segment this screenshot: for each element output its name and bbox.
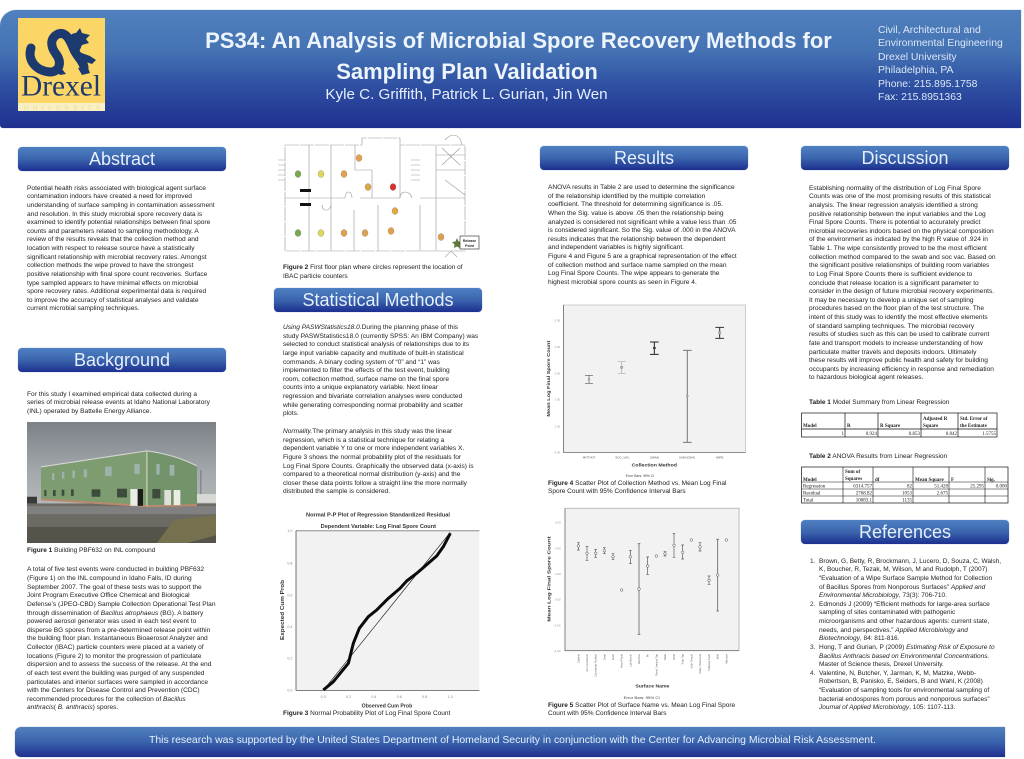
table 2: ANOVA results: Sig. [987, 478, 996, 483]
table 1: model summary: Square [923, 424, 939, 429]
IBAC particle counter markers [295, 154, 444, 240]
results text: highest microbial spore counts as seen in Figure 4. [548, 279, 697, 286]
surface name categories: Hood Panel [620, 654, 624, 668]
background methods text: particulates and interior surfaces were sampled in accordance [27, 679, 208, 686]
y axis ticks: 3.00 [554, 371, 561, 375]
table 1 caption: Table 1 Model Summary from Linear Regression [809, 399, 949, 406]
results text: ANOVA results in Table 2 are used to determine the significance [548, 184, 735, 191]
error bars note: Error Bars: 95% CI [626, 474, 654, 478]
table 2: ANOVA results: 10083.1 [856, 498, 872, 504]
reference entries: Hong, T and Gurian, P (2009) Estimating Risk of Exposure to [819, 644, 995, 651]
background intro text [27, 391, 210, 415]
reference entries: needs, and perspectives.” Applied Microbiology and [819, 627, 968, 634]
release point label [460, 236, 479, 249]
x axis categories: MITT/KIT [583, 455, 595, 459]
plot area [296, 531, 479, 690]
axis tick labels: 0.8 [287, 562, 292, 566]
reference numbers: 2. [810, 601, 815, 608]
abstract text: review of the results reveals that the collection method and [27, 236, 199, 243]
mean points [577, 539, 728, 591]
table 2: ANOVA results: Total [803, 498, 814, 504]
surface name categories: Cabinet [576, 654, 580, 663]
table 2: ANOVA results: Sum of [845, 470, 860, 475]
figure 4 caption: Spore Count with 95% Confidence Interval Bars [548, 488, 686, 495]
plot area [563, 305, 746, 452]
axis tick labels: 1.0 [448, 695, 453, 699]
x axis title: Collection Method [632, 463, 677, 468]
abstract text [27, 185, 215, 312]
surface name categories: Lab Bench [628, 653, 632, 667]
surface name categories: Panel, Vertical Top [654, 653, 658, 676]
y axis ticks: -2.00 [554, 623, 561, 627]
abstract text: current microbial sampling techniques. [27, 305, 140, 312]
abstract text: contamination indoors have created a need for improved [27, 193, 192, 200]
axis tick labels: 0.8 [422, 695, 427, 699]
discussion text: the significant positive relationships of building room variables [809, 262, 989, 269]
reference entries: sampling of sites contaminated with pathogenic [819, 609, 955, 616]
y axis ticks: 1.00 [554, 424, 561, 428]
background methods text: locations (Figure 2) to monitor the progression of particulate [27, 653, 201, 660]
reference entries [819, 558, 1001, 711]
poster title: PS34: An Analysis of Microbial Spore Recovery Methods for [205, 28, 832, 53]
x axis categories [583, 455, 724, 459]
table 1: model summary: 1.5755 [982, 432, 996, 437]
abstract text: to improve the accuracy of statistical analyses and validate [27, 297, 199, 304]
discussion text: particulate matter travels and deposits indoors. Ultimately [809, 349, 976, 356]
release point label: Release [463, 239, 476, 243]
figure 5 caption [548, 702, 735, 717]
figure 5 caption: Figure 5 Scatter Plot of Surface Name vs. Mean Log Final Spore [548, 702, 735, 709]
background methods text: Joint Program Executive Office Chemical and Biological [27, 592, 190, 599]
surface name categories: Stair Treads [689, 653, 693, 668]
figure 3 caption: Figure 3 Normal Probability Plot of Log Final Spore Count [283, 710, 450, 717]
figure 2 caption: IBAC particle counters [283, 273, 348, 280]
table 1: model summary: the Estimate [960, 424, 988, 429]
discussion text: consider in the design of future microbial recovery experiments. [809, 288, 994, 295]
release point label: Point [465, 244, 475, 248]
reference numbers: 1. [810, 558, 815, 565]
table 1: model summary: Std. Error of [960, 417, 988, 422]
reference entries: Master of Science thesis, Drexel University. [819, 661, 944, 668]
abstract text: counts and parameters related to sampling methodology. A [27, 228, 199, 235]
axis tick labels: 0.0 [287, 689, 292, 693]
table 2: ANOVA results: Squares [845, 477, 862, 482]
table 2: ANOVA results: F [951, 478, 954, 483]
statistical methods text: plots. [283, 410, 299, 417]
statistical methods text: room, collection method, surface name on the final spore [283, 376, 449, 383]
section heading: References [801, 520, 1009, 544]
background intro text: (INL) operated by Battelle Energy Alliance. [27, 408, 151, 415]
table 2: ANOVA results: Mean Square [915, 478, 944, 483]
discussion text: to Log Final Spore Counts there is sufficient evidence to [809, 271, 972, 278]
surface name categories: Tabletop Rack [707, 653, 711, 671]
table 2: ANOVA results: 1053 [902, 492, 912, 496]
background methods text: (Figure 1) on the INL compound in Idaho Falls, ID during [27, 575, 192, 582]
background methods text: recommended procedures for the collection of Bacillus [27, 696, 186, 703]
error bars [577, 533, 719, 634]
table 2: ANOVA results: 51.428 [934, 484, 948, 490]
table 1: model summary: R [847, 424, 851, 429]
abstract text: spore recovery rates. Additional experimental data is required [27, 288, 206, 295]
table 1: model summary: 0.853 [909, 432, 920, 437]
reference entries: K, Boucher, R, Tezak, M, Wilson, M and Rudolph, T (2007) [819, 566, 987, 573]
background methods text: of each test event the building was purged of any suspended [27, 670, 204, 677]
contact details: Philadelphia, PA [878, 65, 953, 76]
statistical methods text: study PASWStatistics18.0 (currently SPSS: An IBM Company) was [283, 333, 478, 340]
surface name categories: Floor [611, 654, 615, 660]
contact details: Drexel University [878, 52, 957, 63]
discussion text: fate and transport models to increase understanding of how [809, 340, 983, 347]
results text: results indicates that the relationship between the dependent [548, 236, 725, 243]
x axis categories: WIPE [716, 455, 724, 459]
table 1: model summary: Adjusted R [923, 417, 948, 422]
authors: Kyle C. Griffith, Patrick L. Gurian, Jin Wen [325, 86, 608, 103]
discussion text [809, 185, 996, 381]
table 1: model summary [801, 412, 998, 438]
table 2: ANOVA results: 0.000 [996, 484, 1008, 490]
abstract text: collection methods the wipe proved to have the strongest [27, 262, 193, 269]
discussion text: analysis. The linear regression analysis identified a strong [809, 202, 978, 209]
section heading: Abstract: Abstract [89, 149, 155, 169]
section heading: References: References [859, 522, 951, 542]
background methods text [27, 566, 216, 711]
section heading: Background [18, 348, 226, 372]
surface name categories: Machine [637, 653, 641, 664]
figure 5 caption: Count with 95% Confidence Interval Bars [548, 710, 667, 717]
error bars [585, 327, 724, 442]
results text: coefficient. The threshold for determining significance is .05. [548, 201, 723, 208]
contact details: Civil, Architectural and [878, 24, 981, 36]
y axis ticks: 6.00 [555, 520, 561, 524]
section heading: Abstract [18, 147, 226, 171]
mean points [588, 331, 721, 397]
statistical methods text: counts into a unique explanatory variable. Next linear [283, 384, 438, 391]
section heading: Background: Background [74, 350, 170, 370]
background methods text: anthracis( B. anthracis) spores. [27, 704, 118, 711]
abstract text: type sampled appears to have minimal effects on microbial [27, 280, 198, 287]
axis tick labels: 0.4 [371, 695, 376, 699]
background intro text: For this study I examined empirical data collected during a [27, 391, 197, 398]
discussion text: Counts was one of the most promising results of this statistical [809, 193, 991, 200]
background methods text: Collector (IBAC) particle counters were placed at a variety of [27, 644, 204, 651]
surface name categories: Window [724, 654, 728, 663]
results text [548, 184, 737, 286]
reference numbers: 3. [810, 644, 815, 651]
surface name categories [576, 653, 728, 677]
surface name categories: Desk [602, 653, 606, 660]
discussion text: conclude that release location is a significant parameter to [809, 280, 979, 287]
reference entries: Biotechnology, 84: 811-816. [819, 635, 899, 642]
error bars note: Error Bars: 95% CI [624, 696, 660, 700]
statistical methods text: large input variable capacity and multitude of built-in statistical [283, 350, 464, 357]
figure 1: photo of building PBF632 [27, 422, 216, 543]
plot area [565, 508, 739, 651]
background methods text: with the Centers for Disease Control and Prevention (CDC) [27, 687, 200, 694]
table 2: ANOVA results: Model [803, 478, 817, 483]
figure 2 caption: Figure 2 First floor plan where circles represent the location of [283, 264, 463, 271]
surface name categories: Pit [646, 654, 650, 657]
axis tick labels: 0.2 [287, 657, 292, 661]
reference entries: Brown, G, Betty, R, Brockmann, J, Lucero, D, Souza, C, Walsh, [819, 558, 1001, 565]
figure 3: normal P-P plot [280, 512, 480, 709]
table 2: ANOVA results: Residual [803, 492, 821, 496]
statistical methods text: Using PASWStatistics18.0.During the planning phase of this [283, 324, 458, 331]
section heading: Results: Results [614, 148, 674, 168]
figure 4: collection method error bars [546, 304, 746, 478]
table 1: model summary: 0.924 [866, 432, 878, 437]
background methods text: the building floor plan. Instantaneous Bioaerosol Analyzer and [27, 635, 208, 642]
y axis title: Mean Log Final Spore Count [546, 340, 551, 417]
statistical methods text: selected to conduct statistical analysis of relationships due to its [283, 341, 469, 348]
y axis ticks: 4.00 [555, 546, 561, 550]
figure 2: first floor plan [278, 135, 480, 258]
table 2: ANOVA results: df [875, 478, 880, 483]
results text: Log Final Spore Counts. The wipe appears to generate the [548, 270, 719, 277]
table 2: ANOVA results: 25.295 [970, 484, 984, 490]
y axis ticks: 0.00 [555, 598, 561, 602]
reference entries: Environmental Microbiology, 73(3): 706-710. [819, 592, 947, 599]
section heading: Statistical Methods: Statistical Methods [302, 290, 454, 310]
background methods text: disperse BG spores from a pre-determined release point within [27, 627, 210, 634]
reference entries: Bacillus Anthracis based on Environmental Concentrations. [819, 653, 989, 660]
results text: Figure 4 and Figure 5 are a graphical representation of the effect [548, 253, 737, 260]
section heading: Statistical Methods [274, 288, 482, 312]
discussion text: microbial recoveries indoors based on the physical composition [809, 228, 994, 235]
statistical methods text [283, 324, 478, 417]
y axis ticks [554, 520, 561, 653]
table 2: ANOVA results: 82 [907, 484, 912, 490]
discussion text: It may be necessary to develop a unique set of sampling [809, 297, 974, 304]
normality text: dependent variable Y to one or more independent variables X. [283, 445, 464, 452]
section heading: Results [540, 146, 748, 170]
x axis label: Observed Cum Prob [362, 703, 412, 709]
results text: of the relationship identified by the multiple correlation [548, 193, 705, 200]
y axis ticks: 5.00 [554, 319, 561, 323]
x axis title: Surface Name [635, 684, 670, 689]
discussion text: procedures based on the floor plan of the test structure. The [809, 305, 984, 312]
statistical methods text: commands. A binary coding system of “0” and “1” was [283, 358, 440, 366]
footer banner [15, 727, 1005, 757]
header banner [0, 10, 1021, 128]
background methods text: powered aerosol generator was used in each test event to [27, 618, 196, 625]
y axis ticks: 4.00 [554, 345, 561, 349]
x axis categories: SWAB [650, 455, 659, 459]
figure 5: surface name error bars [546, 508, 740, 700]
reference diagonal [323, 532, 450, 690]
poster title: Sampling Plan Validation [336, 59, 598, 84]
results text: and independent variables is highly significant. [548, 244, 684, 251]
reference entries: Journal of Applied Microbiology, 105: 1107-113. [819, 704, 955, 711]
discussion text: these results will improve public health and safety for building [809, 357, 988, 364]
normality text: distributed the sample is considered. [283, 488, 390, 495]
y axis ticks [554, 319, 561, 454]
results text: of collection method and surface name sampled on the mean [548, 262, 727, 269]
abstract text: Potential health risks associated with biological agent surface [27, 185, 206, 192]
discussion text: to hazardous biological agent releases. [809, 374, 923, 381]
background methods text: through dissemination of Bacillus atrophaeus (BG). A battery [27, 610, 203, 617]
table 2: ANOVA results: Regression [803, 484, 826, 490]
reference numbers [810, 558, 815, 677]
normality text: Log Final Spore Counts. Graphically the observed data (x-axis) is [283, 462, 474, 470]
results text: analyzed is considered not significant while a value less than .05 [548, 218, 736, 226]
discussion text: Final Spore Counts. There is potential to accurately predict [809, 219, 980, 226]
logo: Drexel University dragon [18, 18, 105, 111]
surface name categories: Air Conditioner [585, 654, 589, 672]
x axis categories: SOC_VAC [615, 455, 630, 459]
y axis ticks: 2.00 [554, 398, 561, 402]
table 2 caption: Table 2 ANOVA Results from Linear Regression [809, 453, 947, 460]
abstract text: location with respect to release source have a statistically [27, 245, 194, 252]
discussion text: occupants by increasing efficiency in response and remediation [809, 366, 994, 373]
abstract text: examined to identify potential relationships between final spore [27, 219, 210, 226]
axis tick labels: 0.4 [287, 625, 292, 629]
figure 2 caption [283, 264, 463, 280]
reference numbers: 4. [810, 670, 815, 677]
reference entries: Robertson, B, Panisko, E, Seiders, B and Wahl, K (2008) [819, 678, 983, 685]
table 1: model summary: 1 [842, 432, 844, 437]
table 1: model summary: R Square [880, 424, 901, 429]
statistical methods text: regression and bivariate correlation analyses were conducted [283, 393, 462, 400]
discussion text: of standard sampling techniques. The microbial recovery [809, 323, 974, 330]
contact details [878, 24, 1003, 103]
figure 4 caption [548, 480, 726, 495]
figure 4 caption: Figure 4 Scatter Plot of Collection Method vs. Mean Log Final [548, 480, 726, 487]
surface name categories: Table, Horizontal [698, 654, 702, 674]
reference entries: “Evaluation of a Wipe Surface Sample Method for Collection [819, 575, 992, 582]
reference entries: of Bacillus Spores from Nonporous Surfaces” Applied and [819, 584, 985, 591]
table 2: ANOVA results: 2768.82 [856, 492, 872, 496]
axis tick labels: 0.0 [321, 695, 326, 699]
y axis label: Expected Cum Prob [280, 580, 286, 640]
abstract text: and resolution. In this study microbial spore recovery data is [27, 211, 202, 218]
abstract text: understanding of surface sampling in contamination assessment [27, 202, 215, 209]
axis tick labels: 0.2 [346, 695, 351, 699]
y axis ticks: 2.00 [555, 572, 561, 576]
statistical methods text: implemented to filter the effects of the test event, building [283, 367, 450, 374]
results text: is considered significant. So the Sig. value of .000 in the ANOVA [548, 227, 736, 234]
normality text [283, 428, 474, 495]
discussion text: results of studies such as this can be used to calibrate current [809, 331, 989, 338]
chart title [306, 513, 451, 530]
background methods text: Defense’s (JPEO-CBD) Sample Collection Operational Test Plan [27, 601, 216, 608]
y axis ticks: 0.00 [554, 450, 561, 454]
table 1: model summary: 0.842 [946, 432, 958, 437]
table 2: ANOVA results [801, 466, 1008, 504]
poster title [205, 28, 832, 84]
references list [810, 558, 1001, 711]
y axis title: Mean Log Final Spore Count [546, 536, 551, 622]
discussion text: Table 1. The wipe consistently proved to be the most efficient [809, 245, 987, 252]
observed residual curve [323, 533, 450, 690]
normality text: closer these data points follow a straight line the more normally [283, 480, 467, 487]
logo: Drexel University dragon: Drexel [21, 70, 101, 102]
axis tick labels: 1.0 [287, 529, 292, 533]
discussion text: intent of this study was to identify the most effective elements [809, 314, 988, 321]
table 2: ANOVA results: 1135 [902, 498, 912, 504]
background methods text: September 2007. The goal of these tests was to support the [27, 584, 202, 591]
axis tick labels [287, 529, 453, 699]
reference entries: bacterial endospores from porous and nonporous surfaces” [819, 696, 990, 703]
funding acknowledgement: This research was supported by the United States Department of Homeland Security in conjunction with the Center for Advancing Microbial Risk Assessment. [149, 735, 876, 746]
contact details: Environmental Engineering [878, 38, 1003, 49]
background intro text: series of microbial release events at Idaho National Laboratory [27, 399, 210, 406]
release point star [452, 238, 462, 248]
section heading: Discussion [801, 146, 1009, 170]
surface name categories: Countertop Surface [594, 653, 598, 677]
abstract text: significant relationship with microbial recovery rates. Amongst [27, 254, 207, 261]
reference entries: Valentine, N, Butcher, Y, Jarman, K, M, Matzke, Webb- [819, 670, 976, 677]
chart title: Dependent Variable: Log Final Spore Count [321, 524, 436, 530]
reference entries: “Evaluation of sampling tools for environmental sampling of [819, 687, 989, 694]
statistical methods text: while generating corresponding normal probability and scatter [283, 402, 463, 409]
surface name categories: Table [663, 653, 667, 660]
x axis categories: UNKNOWN [679, 455, 695, 459]
normality text: compared to a theoretical normal distribution (y-axis) and the [283, 471, 460, 478]
normality text: regression, which is a statistical technique for relating a [283, 437, 444, 444]
axis tick labels: 0.6 [397, 695, 402, 699]
background methods text: dispersion and to assess the success of the release. At the end [27, 661, 211, 668]
surface name categories: Wall [716, 654, 720, 659]
abstract text: positive relationship with final spore count recoveries. Surface [27, 271, 207, 278]
table 2: ANOVA results: 6314.757 [853, 484, 872, 490]
surface name categories: Shelf [672, 654, 676, 660]
normality text: Normality.The primary analysis in this study was the linear [283, 428, 452, 435]
section heading: Discussion: Discussion [861, 148, 949, 168]
surface name categories: Step Top [681, 653, 685, 664]
table 1: model summary: Model [803, 424, 817, 429]
discussion text: collection method compared to the swab and soc vac. Based on [809, 254, 996, 261]
reference entries: microorganisms and other hazardous agents: current state, [819, 618, 989, 625]
contact details: Fax: 215.8951363 [878, 92, 962, 103]
y axis ticks: -4.00 [554, 649, 561, 653]
discussion text: of the environment as indicated by the high R value of .924 in [809, 236, 988, 243]
normality text: Figure 3 shows the normal probability plot of the residuals for [283, 454, 461, 461]
table 2: ANOVA results: 2.675 [937, 492, 948, 496]
axis tick labels: 0.6 [287, 593, 292, 597]
contact details: Phone: 215.895.1758 [878, 79, 977, 90]
chart title: Normal P-P Plot of Regression Standardized Residual [306, 513, 451, 519]
figure 1 caption: Figure 1 Building PBF632 on INL compound [27, 547, 155, 554]
discussion text: positive relationship between the input variables and the Log [809, 211, 986, 218]
results text: When the Sig. value is above .05 then the relationship being [548, 210, 724, 217]
discussion text: Establishing normality of the distribution of Log Final Spore [809, 185, 981, 192]
background methods text: A total of five test events were conducted in building PBF632 [27, 566, 204, 573]
reference entries: Edmonds J (2009) “Efficient methods for large-area surface [819, 601, 990, 608]
